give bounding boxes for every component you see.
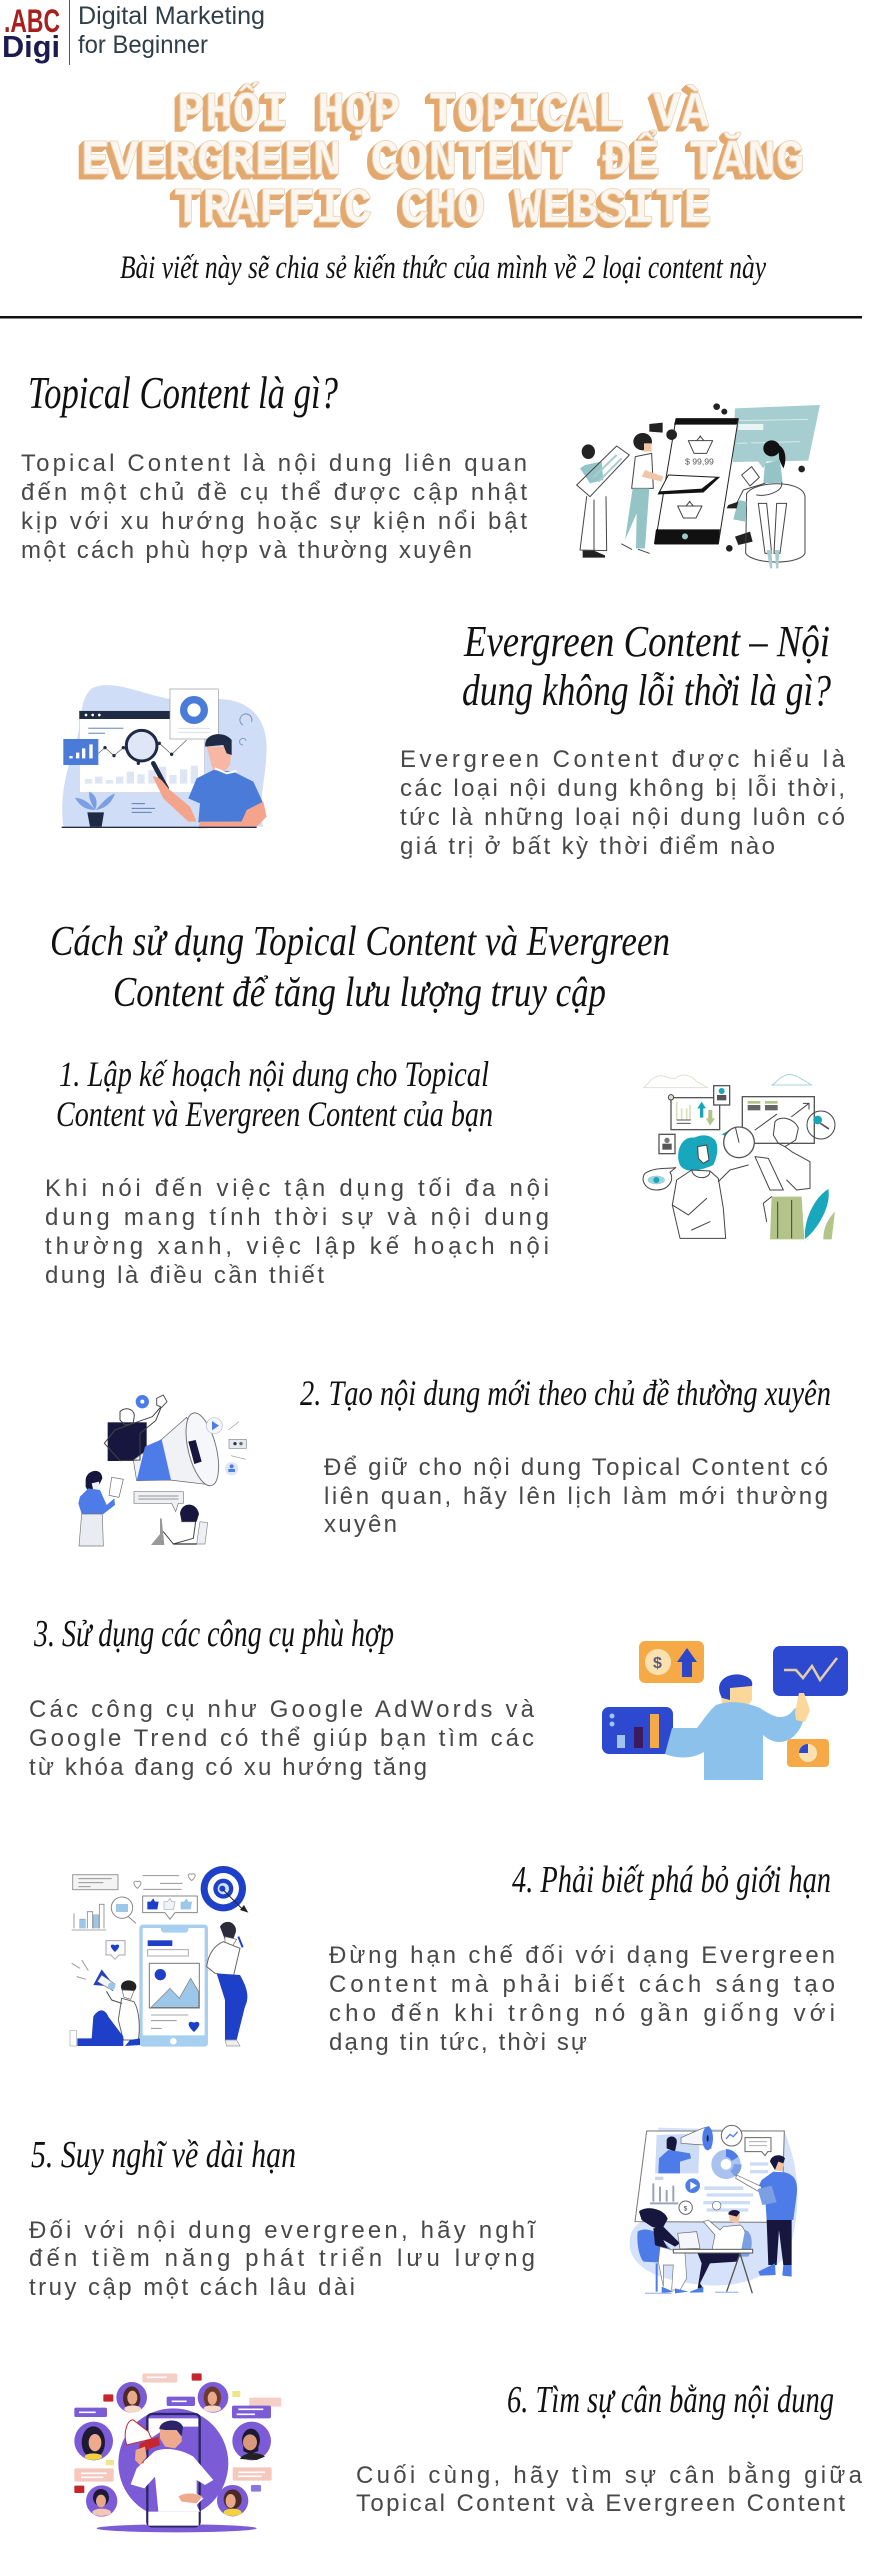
logo: Digi	[2, 29, 60, 64]
text: step 6	[356, 2462, 863, 2517]
logo: for Beginner	[78, 31, 208, 59]
illustration: man with dashboards	[602, 1641, 848, 1780]
section: step 1	[45, 1054, 549, 1289]
woman with notebook	[755, 1118, 835, 1239]
text: step 5: đến tiềm năng phát triển lưu lượng	[29, 2245, 535, 2272]
text: step 1: dung mang tính thời sự và nội dung	[45, 1204, 549, 1231]
text: step 4	[329, 1942, 835, 2056]
text: step 6: Topical Content và Evergreen Content	[356, 2490, 845, 2517]
card: money up: $	[653, 1655, 662, 1672]
text: step 4: cho đến khi trông nó gần giống với	[329, 2000, 835, 2027]
text: step 4: Đừng hạn chế đối với dạng Evergreen	[329, 1942, 835, 1969]
logo	[2, 0, 265, 65]
text: Evergreen Content definition	[400, 746, 846, 860]
section: step 4	[329, 1859, 835, 2056]
man with megaphone	[70, 1960, 140, 2046]
heading: step 1: Content và Evergreen Content của bạn	[56, 1094, 493, 1134]
section: step 2	[300, 1373, 831, 1538]
heading: Topical Content: Topical Content là gì?	[28, 367, 338, 418]
text: step 1	[45, 1175, 549, 1289]
title	[81, 81, 805, 238]
header divider	[0, 316, 862, 318]
woman with paper	[78, 1471, 123, 1546]
text: step 5	[29, 2217, 536, 2301]
heading: step 1: 1. Lập kế hoạch nội dung cho Topical	[59, 1054, 489, 1094]
section: Topical Content	[21, 367, 527, 564]
man with megaphone	[125, 2420, 213, 2512]
plant	[75, 792, 115, 827]
text: Topical Content definition: đến một chủ đề cụ thể được cập nhật	[21, 479, 527, 506]
card: trend line	[773, 1646, 848, 1696]
woman at desk	[637, 2208, 700, 2293]
illustration: team meeting	[630, 2125, 797, 2293]
heading: step 1	[56, 1054, 493, 1134]
text: step 3: Google Trend có thể giúp bạn tìm các	[29, 1725, 534, 1752]
text: step 1: dung là điều cần thiết	[45, 1262, 324, 1289]
text: Topical Content definition	[21, 450, 527, 564]
illustration: influencer with followers	[74, 2373, 281, 2532]
text: Topical Content definition: kịp với xu hướng hoặc sự kiện nổi bật	[21, 508, 527, 535]
heading: how to use: Cách sử dụng Topical Content và Evergreen	[50, 919, 670, 965]
text: step 2: Để giữ cho nội dung Topical Content có	[324, 1454, 828, 1481]
text: Topical Content definition: Topical Content là nội dung liên quan	[21, 450, 527, 477]
illustration: megaphone team	[78, 1395, 246, 1546]
section: step 5	[29, 2134, 536, 2301]
text: Evergreen Content definition: Evergreen Content được hiểu là	[400, 746, 846, 773]
text: step 2	[324, 1454, 828, 1538]
text: step 3	[29, 1696, 535, 1781]
chat bubbles	[74, 2373, 281, 2493]
illustration: social media phone	[70, 1866, 248, 2047]
section: Evergreen Content	[400, 617, 846, 860]
section: step 3	[29, 1613, 535, 1781]
text: step 1: Khi nói đến việc tận dụng tối đa nội	[45, 1175, 549, 1202]
text: Evergreen Content definition: các loại nội dung không bị lỗi thời,	[400, 775, 845, 802]
text: Topical Content definition: một cách phù hợp và thường xuyên	[21, 537, 472, 564]
heading: step 5: 5. Suy nghĩ về dài hạn	[31, 2134, 296, 2176]
man in blue shirt	[153, 734, 267, 828]
title: TRAFFIC CHO WEBSITE	[174, 181, 712, 238]
woman at laptop	[134, 1492, 208, 1545]
phone	[139, 1925, 208, 2047]
woman with teal hair	[672, 1135, 748, 1238]
man from screen	[104, 1395, 167, 1461]
logo: .ABC	[4, 3, 60, 39]
person with document	[577, 444, 629, 558]
text: step 3: từ khóa đang có xu hướng tăng	[29, 1754, 427, 1781]
logo: Digital Marketing	[78, 2, 265, 30]
illustration: online shopping team	[577, 403, 820, 568]
presenter	[736, 2155, 797, 2277]
text: step 4: dạng tin tức, thời sự	[329, 2029, 587, 2056]
heading: how to use	[50, 919, 670, 1016]
illustration: analyst with magnifier	[62, 685, 267, 828]
person with card	[622, 433, 663, 553]
section: step 6	[356, 2379, 863, 2517]
seated woman on cylinder	[727, 439, 805, 568]
text: step 4: Content mà phải biết cách sáng tạo	[329, 1971, 835, 1998]
illustration: planning team	[643, 1074, 835, 1239]
text: Evergreen Content definition: giá trị ở bất kỳ thời điểm nào	[400, 833, 775, 860]
card: bar chart	[602, 1707, 673, 1754]
text: Evergreen Content definition: tức là những loại nội dung luôn có	[400, 804, 845, 831]
heading: Evergreen Content	[462, 617, 831, 715]
title: EVERGREEN CONTENT ĐỂ TĂNG	[81, 130, 805, 190]
text: step 5: Đối với nội dung evergreen, hãy nghĩ	[29, 2217, 536, 2244]
card: pie	[787, 1739, 829, 1767]
title: PHỐI HỢP TOPICAL VÀ	[177, 81, 709, 142]
text: step 5: truy cập một cách lâu dài	[29, 2274, 355, 2301]
heading: how to use: Content để tăng lưu lượng truy cập	[113, 970, 606, 1016]
speech bubbles	[643, 1111, 835, 1190]
heading: step 3: 3. Sử dụng các công cụ phù hợp	[33, 1613, 394, 1655]
text: step 1: thường xanh, việc lập kế hoạch nội	[45, 1233, 549, 1260]
text: step 2: liên quan, hãy lên lịch làm mới thường	[324, 1483, 828, 1510]
text: step 3: Các công cụ như Google AdWords và	[29, 1696, 535, 1723]
text: step 2: xuyên	[324, 1511, 397, 1538]
card: money up	[639, 1641, 704, 1683]
man leaning	[207, 1922, 247, 2046]
illustration: online shopping team: $ 99,99	[685, 457, 714, 467]
man at desk	[645, 2210, 753, 2293]
followers avatars	[74, 2382, 271, 2517]
text: step 6: Cuối cùng, hãy tìm sự cân bằng giữa	[356, 2462, 863, 2489]
man	[665, 1674, 810, 1780]
illustration: team meeting: $	[684, 2205, 688, 2212]
